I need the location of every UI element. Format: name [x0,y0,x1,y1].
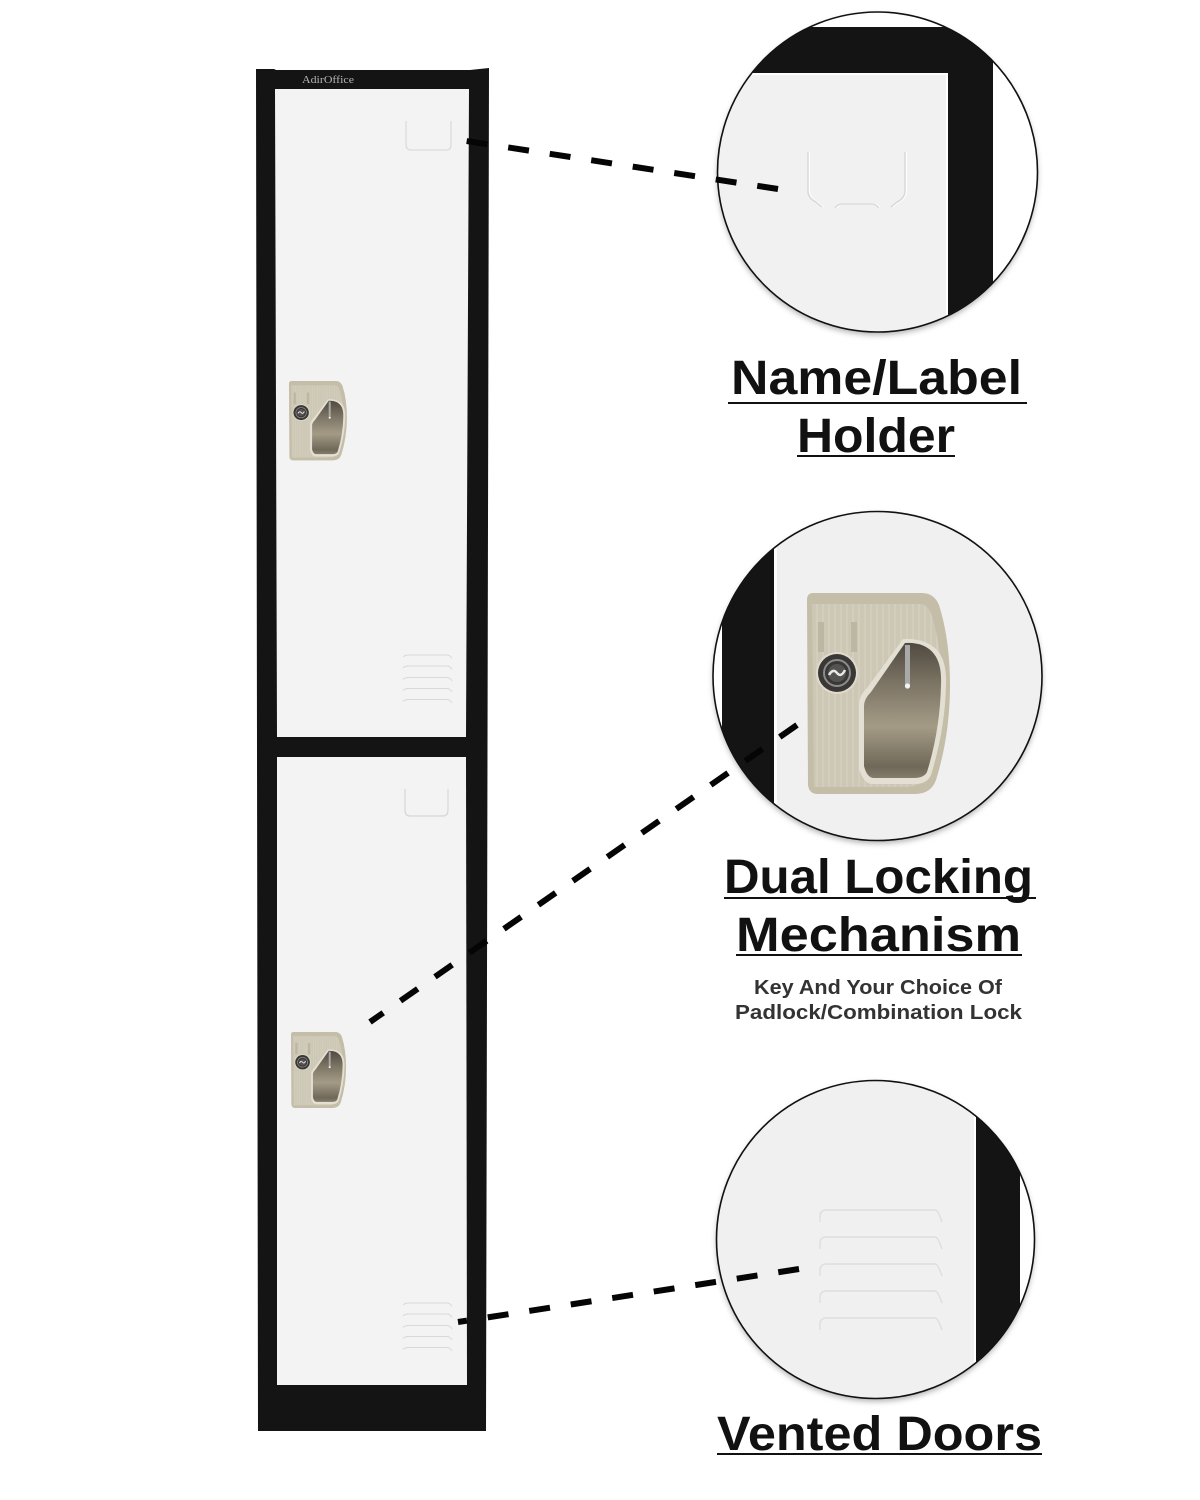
leader line: label holder [460,140,778,189]
brand logo: AdirOffice [302,75,355,86]
lower door vents [403,1303,452,1351]
leader line: locking mechanism [370,725,797,1022]
callout heading: Dual Locking Mechanism: Dual Locking [724,851,1033,904]
upper door [275,89,469,737]
upper door lock [289,381,347,460]
upper label holder [406,121,451,150]
leader line: vented doors [458,1269,799,1322]
callout heading: Name/Label Holder [728,352,1027,463]
callout circle: label holder [700,10,1050,343]
callout circle: locking mechanism [700,510,1050,850]
callout heading: Name/Label Holder: Holder [797,410,955,463]
locker frame [256,68,489,1431]
callout description: Key And Your Choice Of [754,977,1002,999]
callout description [735,977,1023,1024]
callout heading: Dual Locking Mechanism: Mechanism [736,909,1021,962]
lower door [277,757,467,1385]
locker [256,68,489,1431]
callout heading: Vented Doors: Vented Doors [717,1408,1042,1461]
callout circle: vented doors [700,1075,1050,1405]
lower label holder [405,789,448,816]
callout heading: Dual Locking Mechanism [724,851,1036,962]
upper door vents [403,655,452,703]
callout heading: Name/Label Holder: Name/Label [731,352,1022,405]
lower door lock [291,1032,346,1108]
callout description: Padlock/Combination Lock [735,1002,1023,1024]
